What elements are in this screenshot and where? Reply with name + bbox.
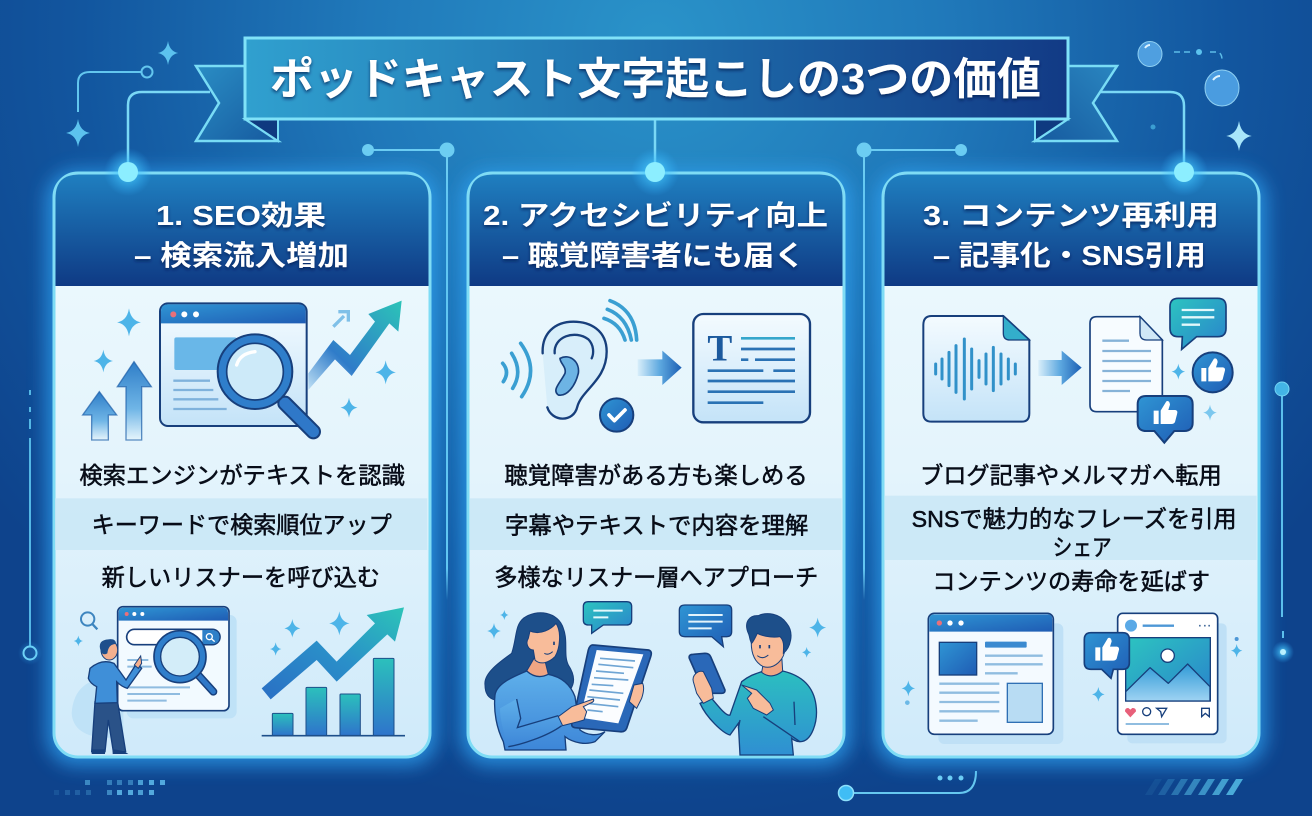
text: line 1: 検索エンジンがテキストを認識 (79, 463, 405, 489)
icon: rising arrows (83, 362, 151, 440)
text band (470, 498, 842, 550)
text: line 3: 新しいリスナーを呼び込む (102, 564, 380, 590)
illustrations and text: 1 SEO (55, 301, 427, 754)
title banner (196, 38, 1117, 141)
illustration: blog page (902, 613, 1063, 744)
bubbles: upper right (1138, 42, 1239, 130)
text: line 3: コンテンツの寿命を延ばす (932, 568, 1210, 594)
illustration: man with phone (679, 605, 826, 755)
illustrations and text: 3 content reuse (885, 298, 1257, 744)
panel header: 1 SEO: 1. SEO効果 (156, 200, 326, 231)
panel header: 2 accessibility (470, 174, 842, 286)
left edge circuit line (18, 390, 42, 665)
right edge circuit line (1272, 382, 1294, 663)
panel header: 2 accessibility: – 聴覚障害者にも届く (502, 240, 805, 271)
glowing node: panel 2 (631, 148, 679, 196)
glowing node: panel 1 (104, 148, 152, 196)
title text: ポッドキャスト文字起こしの3つの価値 (270, 55, 1041, 104)
illustration: social post (1084, 613, 1242, 743)
text: line 1: ブログ記事やメルマガへ転用 (920, 463, 1222, 489)
bottom right stripes (1145, 779, 1243, 795)
illustrations and text: 2 accessibility (470, 301, 842, 755)
icon: sparkles (1172, 364, 1217, 421)
text: line 1: 聴覚障害がある方も楽しめる (504, 463, 808, 489)
icon: trend arrow (308, 301, 402, 390)
arrow: ear to text (638, 351, 682, 385)
arrow: audio to document (1038, 351, 1082, 385)
icon: ear (543, 322, 607, 419)
glowing node: panel 3 (1160, 148, 1208, 196)
panel: 1 SEO (46, 170, 438, 766)
panel header: 1 SEO: – 検索流入増加 (134, 240, 349, 271)
panel header: 2 accessibility: 2. アクセシビリティ向上 (483, 200, 828, 231)
icon: thumb circle (1193, 352, 1233, 392)
icon: thumb bubble (1138, 396, 1193, 443)
text band (55, 498, 427, 550)
icon: small arrow (333, 312, 348, 327)
panel header: 3 content reuse: – 記事化・SNS引用 (933, 240, 1206, 271)
icon: document (1090, 317, 1162, 412)
text: line 2: SNSで魅力的なフレーズを引用 (912, 506, 1237, 532)
chart: bars with rising trend arrow (262, 607, 405, 736)
circuit line: upper right (1100, 92, 1184, 172)
bottom left dot pattern (54, 780, 165, 795)
illustration: woman with tablet (485, 602, 651, 750)
illustration: person at browser (72, 607, 237, 754)
icon: sound waves (503, 301, 637, 397)
text: line 3: 多様なリスナー層へアプローチ (494, 564, 818, 590)
icon: chat bubble (1170, 298, 1226, 349)
sparkle: upper right (1226, 121, 1252, 151)
icon: text document: T (707, 329, 732, 370)
text: line 2 continued: シェア (1053, 534, 1112, 560)
icon: audio file (923, 316, 1029, 422)
panel: 3 content reuse (875, 170, 1267, 766)
center connector (654, 120, 656, 172)
icon: sparkles (94, 308, 396, 418)
icon: check badge (600, 398, 633, 432)
circuit lines: upper left (78, 66, 210, 172)
text: line 2: キーワードで検索順位アップ (92, 512, 392, 538)
panel: 2 accessibility (460, 170, 852, 766)
icon: text document (693, 314, 810, 422)
circuit connector: left of center (362, 142, 454, 600)
text: line 2: 字幕やテキストで内容を理解 (505, 513, 808, 539)
panel header: 1 SEO (56, 174, 428, 286)
panel header: 3 content reuse (884, 174, 1258, 286)
bottom circuit node (838, 771, 976, 800)
sparkles: upper left (66, 41, 178, 147)
circuit connector: right of center (856, 142, 967, 600)
icon: browser with magnifier (160, 303, 313, 432)
text band (885, 496, 1257, 560)
panel header: 3 content reuse: 3. コンテンツ再利用 (923, 200, 1219, 231)
